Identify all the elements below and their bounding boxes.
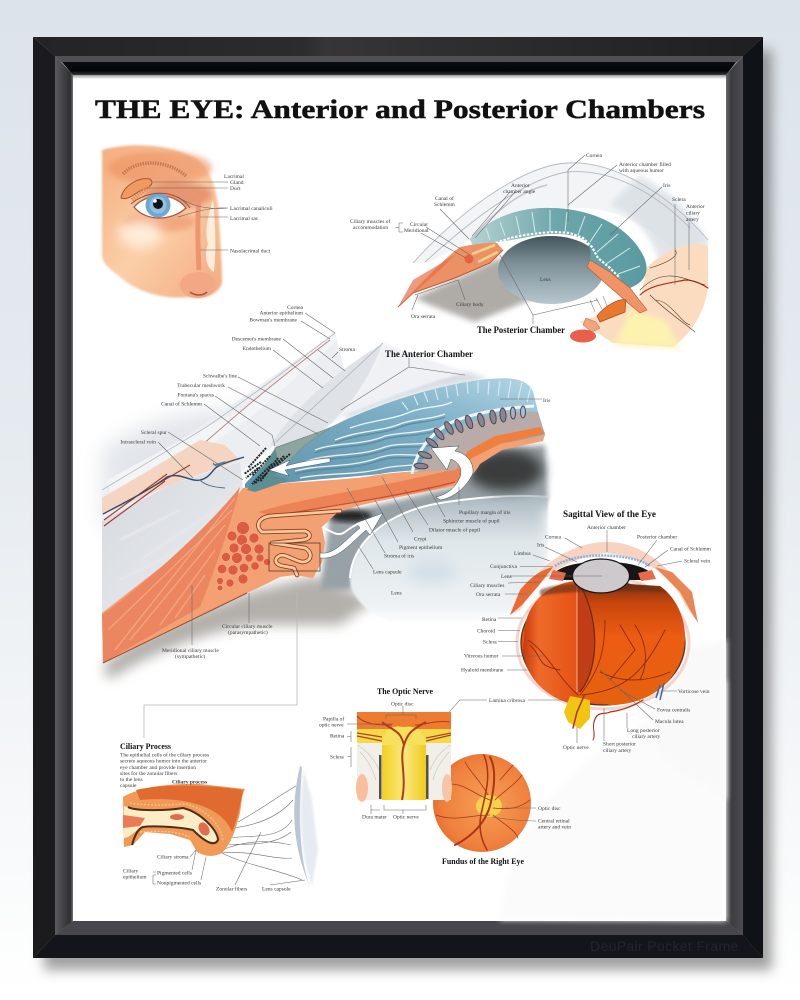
- sagittal labels: Retina: [482, 617, 497, 623]
- posterior labels: Canal of: [435, 195, 454, 202]
- anterior labels: Lens: [391, 590, 402, 596]
- anterior labels: Bowman's membrane: [249, 318, 298, 324]
- anterior labels: Anterior epithelium: [259, 310, 304, 316]
- sagittal labels: Sclera: [483, 640, 497, 646]
- posterior labels: Ciliary body: [456, 302, 484, 308]
- anterior labels: Lens capsule: [373, 570, 402, 576]
- anterior labels: Pigment epithelium: [399, 545, 443, 551]
- ciliary process heading: Ciliary Process: [120, 742, 171, 751]
- eye with iris: [131, 192, 190, 218]
- anterior labels: Dilator muscle of pupil: [429, 526, 481, 534]
- posterior labels: Ora serrata: [411, 314, 436, 320]
- frame brand text: DeuPair Pocket Frame: [590, 938, 739, 954]
- sagittal labels: Scleral vein: [684, 558, 710, 564]
- optic nerve labels: Retina: [330, 734, 345, 740]
- crypts: [414, 406, 526, 469]
- faint watermark shapes: [500, 680, 726, 921]
- anterior labels: Schwalbe's line: [203, 374, 238, 380]
- anterior labels: Fontana's spaces: [177, 392, 214, 398]
- posterior labels: accommodation: [353, 225, 388, 231]
- posterior labels: Anterior: [511, 183, 530, 189]
- anterior labels: Meridional ciliary muscle: [162, 648, 219, 654]
- crypt white rim: [412, 406, 534, 474]
- sagittal labels: Lamina cribrosa: [489, 698, 525, 704]
- vessels: [640, 250, 708, 332]
- optic nerve labels: [319, 702, 426, 820]
- face labels: Duct: [230, 186, 241, 192]
- optic nerve labels: Dura mater: [362, 814, 387, 820]
- face labels: Lacrimal: [224, 174, 244, 180]
- sagittal labels: Macula lutea: [655, 719, 684, 725]
- sagittal labels: Limbus: [514, 551, 531, 557]
- ciliary process description: eye chamber and provide insertion: [120, 765, 196, 771]
- ciliary labels: Ciliary stroma: [157, 854, 189, 860]
- pigmented band: [418, 411, 545, 472]
- ciliary process body: [123, 784, 245, 856]
- ciliary labels: [123, 780, 305, 892]
- optic nerve labels: Sclera: [330, 754, 344, 760]
- lacrimal gland: [121, 179, 152, 199]
- sagittal labels: Lens: [501, 574, 512, 580]
- face labels: Nasolacrimal duct: [230, 248, 271, 254]
- anterior labels: Trabecular meshwork: [177, 383, 225, 389]
- anterior chamber heading: The Anterior Chamber: [385, 349, 473, 359]
- anterior labels: Circular ciliary muscle: [222, 624, 273, 630]
- optic nerve stalk: [564, 696, 590, 729]
- anterior labels: Descemet's membrane: [232, 336, 282, 342]
- iris: [470, 208, 647, 288]
- cornea and sclera: [413, 163, 708, 348]
- anterior labels: Stroma of iris: [384, 552, 414, 560]
- sagittal labels: Ciliary muscles: [470, 583, 504, 589]
- sagittal labels: Canal of Schlemm: [670, 546, 712, 552]
- anterior labels: Scleral spur: [141, 430, 167, 436]
- panel: lacrimal apparatus (face): [102, 145, 273, 298]
- lens and iris of sagittal eye: [549, 559, 656, 593]
- face labels: Lacrimal sac: [230, 216, 259, 222]
- ciliary body right: [587, 260, 647, 313]
- poster sheet: [73, 75, 726, 921]
- posterior vessels: [593, 683, 664, 740]
- sagittal labels: Cornea: [545, 534, 561, 540]
- lens: [320, 445, 560, 626]
- panel: sagittal view of the eye: [413, 509, 712, 754]
- fundus labels: artery and vein: [538, 824, 571, 830]
- posterior labels: Ciliary muscles of: [350, 218, 390, 225]
- ciliary process description: The epithelial cells of the ciliary process: [120, 752, 209, 758]
- posterior labels: chamber angle: [503, 189, 536, 195]
- zonular fibers: [222, 766, 318, 887]
- sagittal labels: Choroid: [477, 628, 495, 634]
- ciliary process description: capsule: [120, 783, 137, 789]
- anterior labels: Iris: [543, 398, 550, 404]
- aqueous flow arrows: [269, 446, 473, 558]
- face labels: Gland: [230, 180, 244, 186]
- anterior labels: Sphincter muscle of pupil: [443, 518, 500, 524]
- sagittal labels: Anterior chamber: [587, 525, 626, 531]
- ciliary process folds: [258, 511, 340, 575]
- iris streaks: [295, 417, 445, 474]
- sagittal labels: Posterior chamber: [637, 534, 677, 540]
- optic nerve labels: optic nerve: [319, 722, 344, 728]
- sagittal labels: Iris: [537, 542, 544, 548]
- pupillary margin: [456, 427, 545, 470]
- optic nerve labels: Optic disc: [391, 702, 414, 708]
- optic disc on fundus: [476, 795, 502, 817]
- title: THE EYE: Anterior and Posterior Chambers: [95, 95, 705, 124]
- anterior labels: (sympathetic): [175, 653, 205, 660]
- panel: ciliary process: [120, 742, 318, 892]
- panel: the optic nerve: [319, 686, 452, 820]
- cornea and sclera background: [102, 333, 490, 613]
- meridional ciliary muscle: [102, 487, 240, 663]
- sagittal labels: Short posterior: [603, 742, 636, 748]
- panel: the posterior chamber: [350, 153, 708, 348]
- ciliary process description: secrete aqueous humor into the anterior: [120, 758, 207, 764]
- shadow under ciliary body: [103, 576, 375, 680]
- sagittal labels: Long posterior: [627, 728, 660, 734]
- lens: [498, 236, 604, 304]
- anterior labels: [120, 305, 550, 738]
- sagittal labels: ciliary artery: [632, 734, 660, 740]
- sagittal labels: ciliary artery: [603, 748, 631, 754]
- optic nerve labels: Optic nerve: [393, 814, 419, 820]
- sagittal labels: Fovea centralis: [657, 708, 690, 714]
- circular ciliary muscle cells: [216, 522, 270, 591]
- posterior labels: Circular: [410, 222, 428, 228]
- anterior labels: Pupillary margin of iris: [459, 509, 510, 516]
- posterior labels: Sclera: [672, 197, 686, 203]
- face illustration: [102, 145, 222, 298]
- optic nerve labels: Papilla of: [323, 716, 344, 722]
- posterior labels: artery: [686, 217, 699, 223]
- ciliary process description: [120, 752, 209, 789]
- anterior labels: Canal of Schlemm: [161, 400, 203, 408]
- iris stroma shading: [258, 466, 468, 516]
- ciliary labels: Zonular fibers: [216, 886, 247, 892]
- ciliary labels: Nonpigmented cells: [157, 880, 201, 886]
- sagittal labels: Conjunctiva: [490, 564, 517, 570]
- anterior labels: Endothelium: [243, 346, 272, 352]
- panel: the anterior chamber: [102, 305, 560, 738]
- panel: fundus of the right eye: [433, 754, 571, 866]
- globe: [521, 581, 685, 705]
- posterior labels: Meridional: [404, 228, 429, 234]
- anterior labels: Intrascleral vein: [120, 440, 156, 446]
- anterior labels: (parasympathetic): [228, 629, 268, 636]
- shadow below ciliary body: [415, 258, 530, 322]
- ciliary body and iris stroma: [102, 434, 545, 663]
- sclera and cornea: [510, 542, 698, 709]
- sagittal heading: Sagittal View of the Eye: [563, 509, 656, 519]
- ciliary body left: [398, 243, 503, 307]
- face labels: Lacrimal canaliculi: [230, 206, 273, 212]
- posterior labels: Anterior chamber filled: [619, 161, 671, 168]
- posterior labels: Iris: [663, 183, 670, 189]
- sagittal labels: Vorticose vein: [678, 689, 710, 695]
- posterior labels: Cornea: [586, 153, 602, 159]
- posterior labels: Lens: [540, 277, 551, 283]
- posterior labels: Schlemm: [434, 202, 455, 208]
- anterior labels: Cornea: [287, 305, 304, 311]
- ciliary labels: Ciliary process: [172, 780, 207, 786]
- ciliary labels: Ciliary: [123, 868, 139, 874]
- sagittal labels: [413, 525, 712, 754]
- fundus labels: [492, 806, 571, 830]
- fundus disc: [433, 754, 531, 852]
- optic nerve heading: The Optic Nerve: [377, 686, 433, 696]
- trabecular meshwork: [247, 428, 330, 492]
- fundus labels: Optic disc: [538, 806, 561, 812]
- ciliary labels: epithelium: [123, 874, 147, 880]
- anterior labels: Stroma: [339, 347, 355, 353]
- ciliary labels: Pigmented cells: [157, 870, 192, 876]
- fundus heading: Fundus of the Right Eye: [442, 856, 524, 866]
- ciliary process description: sites for the zonular fibers: [120, 770, 177, 777]
- posterior labels: with aqueous humor: [619, 168, 664, 174]
- nerve cross-section: [356, 712, 452, 802]
- posterior labels: [350, 153, 705, 324]
- sagittal labels: Vitreous humor: [464, 654, 499, 660]
- iris: [244, 378, 545, 492]
- ciliary process description: to the lens: [120, 777, 143, 783]
- anterior labels: Crypt: [414, 536, 427, 542]
- detail inset box: [269, 543, 320, 571]
- sagittal labels: Hyaloid membrane: [461, 668, 504, 674]
- retinal vessels: [436, 755, 530, 850]
- ciliary labels: Lens capsule: [262, 886, 291, 892]
- posterior labels: Anterior: [686, 204, 705, 210]
- sagittal labels: Ora serrata: [476, 592, 501, 598]
- posterior chamber heading: The Posterior Chamber: [477, 325, 565, 335]
- posterior labels: ciliary: [686, 210, 700, 216]
- fundus labels: Central retinal: [538, 818, 570, 824]
- sagittal labels: Optic nerve: [563, 745, 589, 751]
- face labels: [146, 174, 273, 254]
